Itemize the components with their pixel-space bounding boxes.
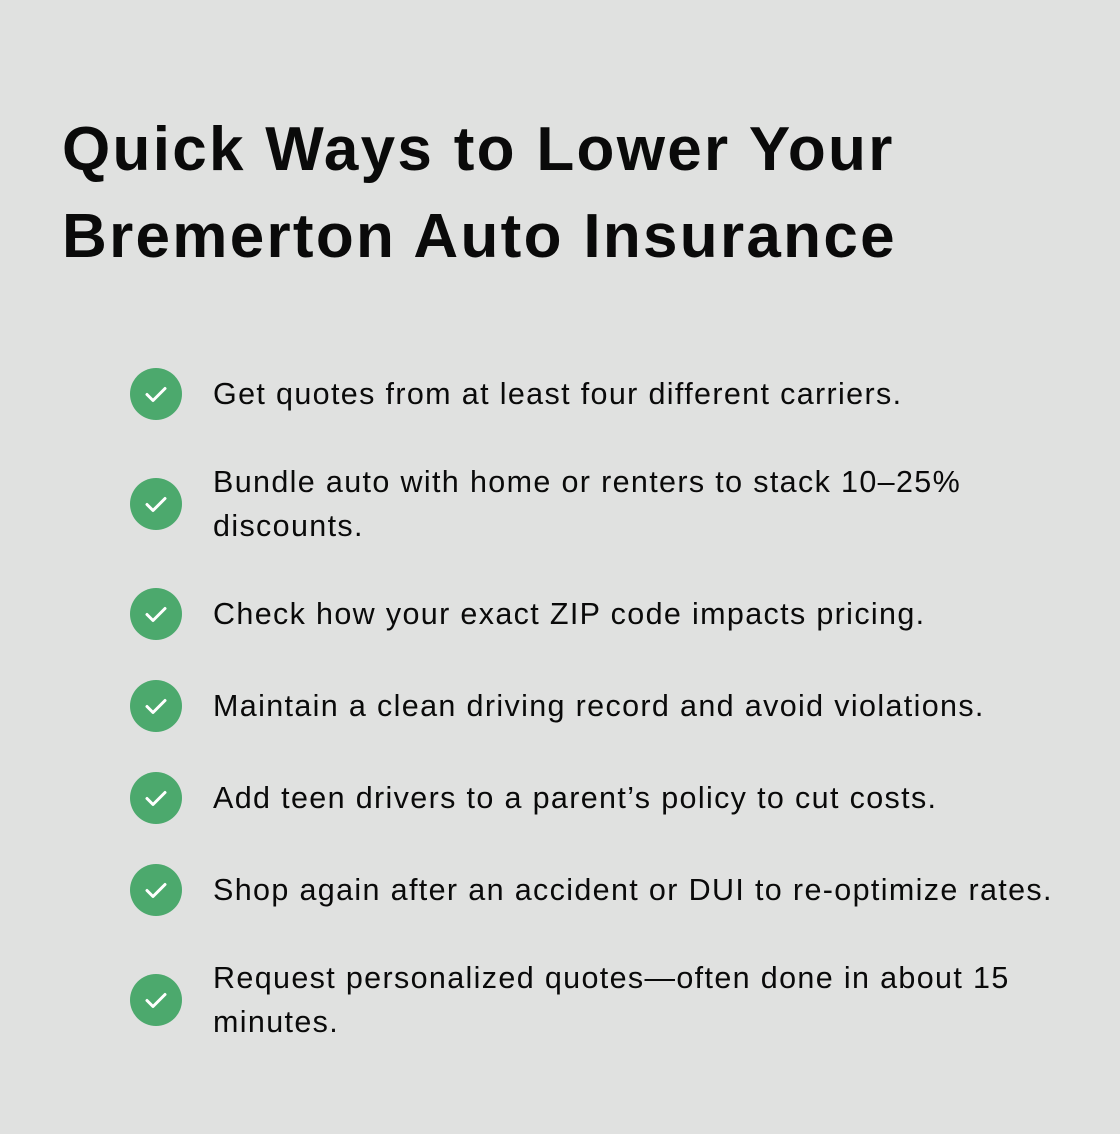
item 2: [130, 465, 961, 543]
item 5: Add teen drivers to a parent’s policy to cut costs.: [213, 781, 937, 815]
item 2: Bundle auto with home or renters to stack 10–25%: [213, 465, 961, 499]
item 3: [130, 588, 926, 640]
item 4: Maintain a clean driving record and avoid violations.: [213, 689, 985, 723]
item 7: [130, 961, 1010, 1039]
item 2: discounts.: [213, 509, 364, 543]
item 5: [130, 772, 937, 824]
item 6: [130, 864, 1053, 916]
item 1: [130, 368, 902, 420]
title: Bremerton Auto Insurance: [62, 202, 897, 271]
title: Quick Ways to Lower Your: [62, 115, 895, 184]
title: [62, 115, 897, 271]
item 3: Check how your exact ZIP code impacts pricing.: [213, 597, 926, 631]
item 1: Get quotes from at least four different carriers.: [213, 377, 902, 411]
item 4: [130, 680, 985, 732]
item 7: minutes.: [213, 1005, 339, 1039]
item 7: Request personalized quotes—often done in about 15: [213, 961, 1010, 995]
item 6: Shop again after an accident or DUI to re-optimize rates.: [213, 873, 1053, 907]
